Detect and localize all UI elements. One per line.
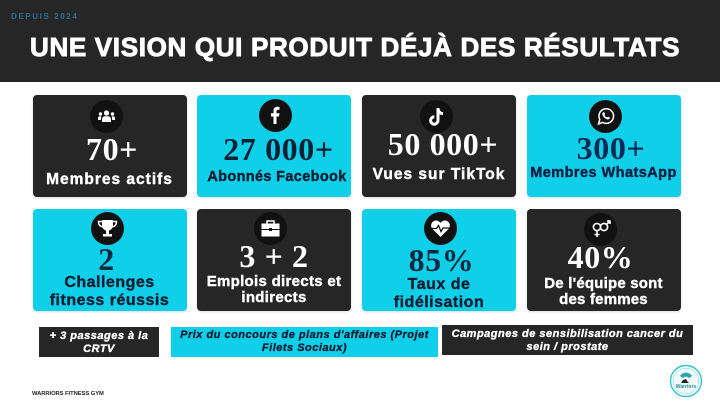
note: prix du concours [171,327,438,357]
icon: gender symbols [584,213,616,246]
note: passages CRTV: + 3 passages à la [50,330,148,342]
card: abonnés facebook [197,95,351,197]
note: prix du concours: Prix du concours de plans d'affaires (Projet [180,329,429,341]
label [50,274,169,308]
value: 27 000+ [223,130,334,166]
value: 70+ [86,131,138,167]
icon: whatsapp [588,100,622,133]
label: De l'équipe sont [544,275,663,292]
value: 300+ [577,130,645,166]
logo: warriors: Warriors [676,384,696,390]
icon: heart with pulse [424,212,457,244]
note: passages CRTV [39,327,159,357]
card: vues sur tiktok [362,95,516,197]
note: campagnes de sensibilisation: Campagnes de sensibilisation cancer du [452,328,683,340]
note: passages CRTV: CRTV [83,342,115,354]
icon: briefcase [254,212,287,245]
card: membres whatsapp [526,95,680,197]
footer brand name: WARRIORS FITNESS GYM [32,391,104,397]
label: Challenges [64,274,155,291]
label: Vues sur TikTok [373,166,505,182]
label: Taux de [408,276,470,293]
logo: warriors [670,364,702,398]
label [394,276,484,311]
note: prix du concours: Filets Sociaux) [262,342,347,354]
icon: group of people [90,100,122,133]
note: campagnes de sensibilisation: sein / prostate [526,341,609,353]
icon: facebook [259,99,292,132]
label: des femmes [559,291,648,308]
label: Emplois directs et [207,273,341,290]
label: indirects [241,289,307,306]
card: challenges [32,209,186,311]
value: 3 + 2 [239,238,309,274]
label [207,273,341,306]
label: Abonnés Facebook [207,169,347,185]
card: membres actifs [32,95,186,197]
header band [0,0,720,82]
label: Membres WhatsApp [530,165,677,181]
icon: trophy [90,212,124,245]
card: emplois [197,209,351,311]
value: 85% [409,242,474,278]
value: 50 000+ [388,126,498,162]
eyebrow: depuis 2024: DEPUIS 2024 [11,12,78,21]
value: 2 [98,240,115,276]
label: fitness réussis [50,292,169,308]
label: fidélisation [394,294,484,311]
value: 40% [568,239,633,275]
card: femmes [526,209,680,311]
title: UNE VISION QUI PRODUIT DÉJÀ DES RÉSULTATS [30,32,680,62]
label [544,275,663,308]
note: campagnes de sensibilisation [442,325,693,355]
icon: tiktok [420,100,452,133]
card: fidélisation [362,209,516,311]
label: Membres actifs [46,170,173,188]
